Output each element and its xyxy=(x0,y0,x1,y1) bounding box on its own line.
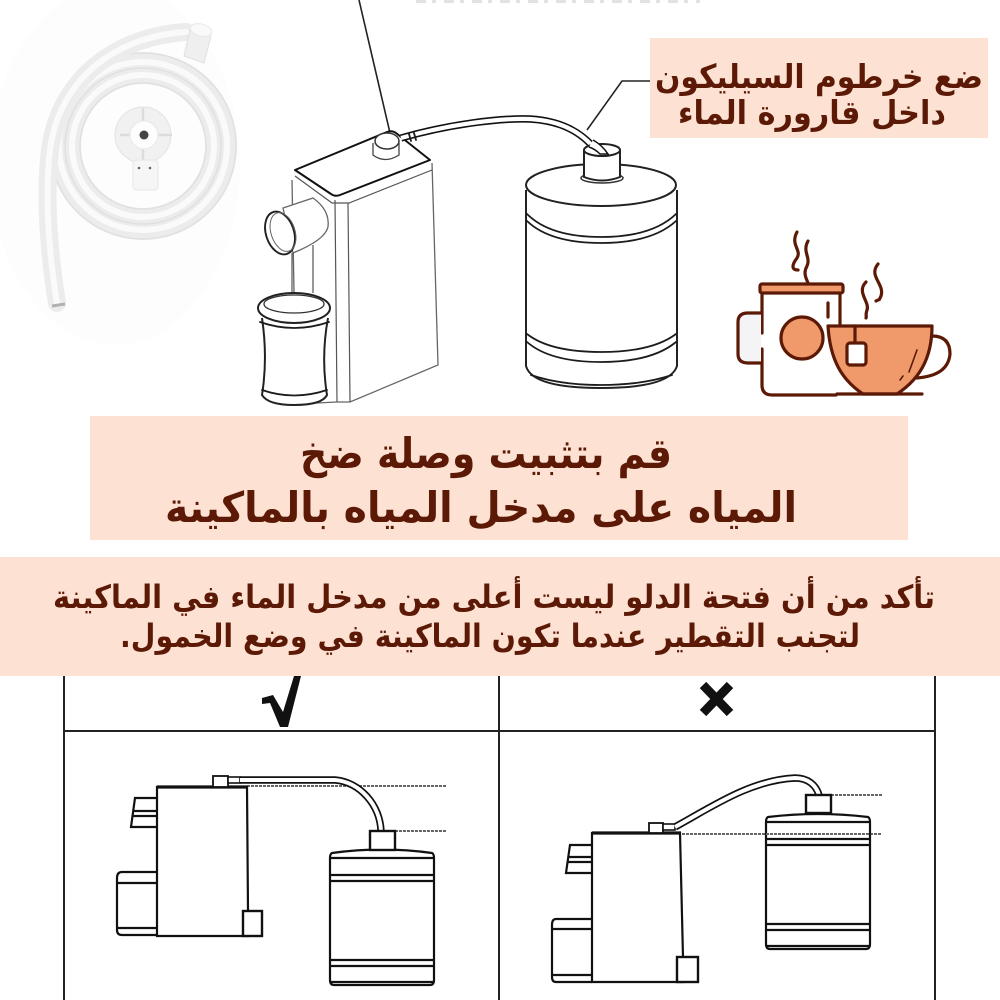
diagram: machine connected to water bottle xyxy=(258,0,677,405)
elbow connector xyxy=(184,22,213,63)
photo: silicone hose with connector xyxy=(0,0,240,345)
icon: wrong cross mark xyxy=(703,685,730,713)
mug xyxy=(738,232,843,395)
inlet knob xyxy=(373,143,399,160)
diagram: correct placement xyxy=(117,776,447,985)
comparison table frame xyxy=(64,676,935,1000)
connector hub xyxy=(115,107,172,190)
hose xyxy=(240,780,381,831)
reference dotted lines xyxy=(682,795,882,834)
bucket xyxy=(766,795,870,949)
warning banner: bucket opening height xyxy=(0,557,1000,676)
callout: silicone hose instruction xyxy=(650,38,988,138)
leader line to callout xyxy=(587,81,650,130)
warning banner: bucket opening height: لتجنب التقطير عندما تكون الماكينة في وضع الخمول. xyxy=(120,617,860,655)
water machine xyxy=(260,131,438,404)
warning banner: bucket opening height: تأكد من أن فتحة الدلو ليست أعلى من مدخل الماء في الماكينة xyxy=(53,576,935,616)
hose xyxy=(675,778,819,827)
hose coil xyxy=(48,32,236,306)
icon: correct check mark xyxy=(262,676,301,727)
bucket xyxy=(330,831,434,985)
icon: mug and tea cup xyxy=(738,232,950,395)
heading: fix the water pump connector: قم بتثبيت وصلة ضخ xyxy=(300,429,672,479)
reference dotted lines xyxy=(247,786,447,831)
heading: fix the water pump connector xyxy=(90,416,908,540)
water bottle xyxy=(526,140,677,388)
callout: silicone hose instruction: داخل قارورة الماء xyxy=(678,93,946,133)
machine xyxy=(552,823,698,982)
diagram: wrong placement xyxy=(552,778,882,982)
cup xyxy=(258,293,330,405)
heading: fix the water pump connector: المياه على مدخل المياه بالماكينة xyxy=(165,483,797,532)
hose xyxy=(401,119,598,153)
tea cup xyxy=(828,264,950,394)
outlet nozzle xyxy=(283,198,328,253)
leader line to inlet xyxy=(359,0,390,133)
machine xyxy=(117,776,262,936)
